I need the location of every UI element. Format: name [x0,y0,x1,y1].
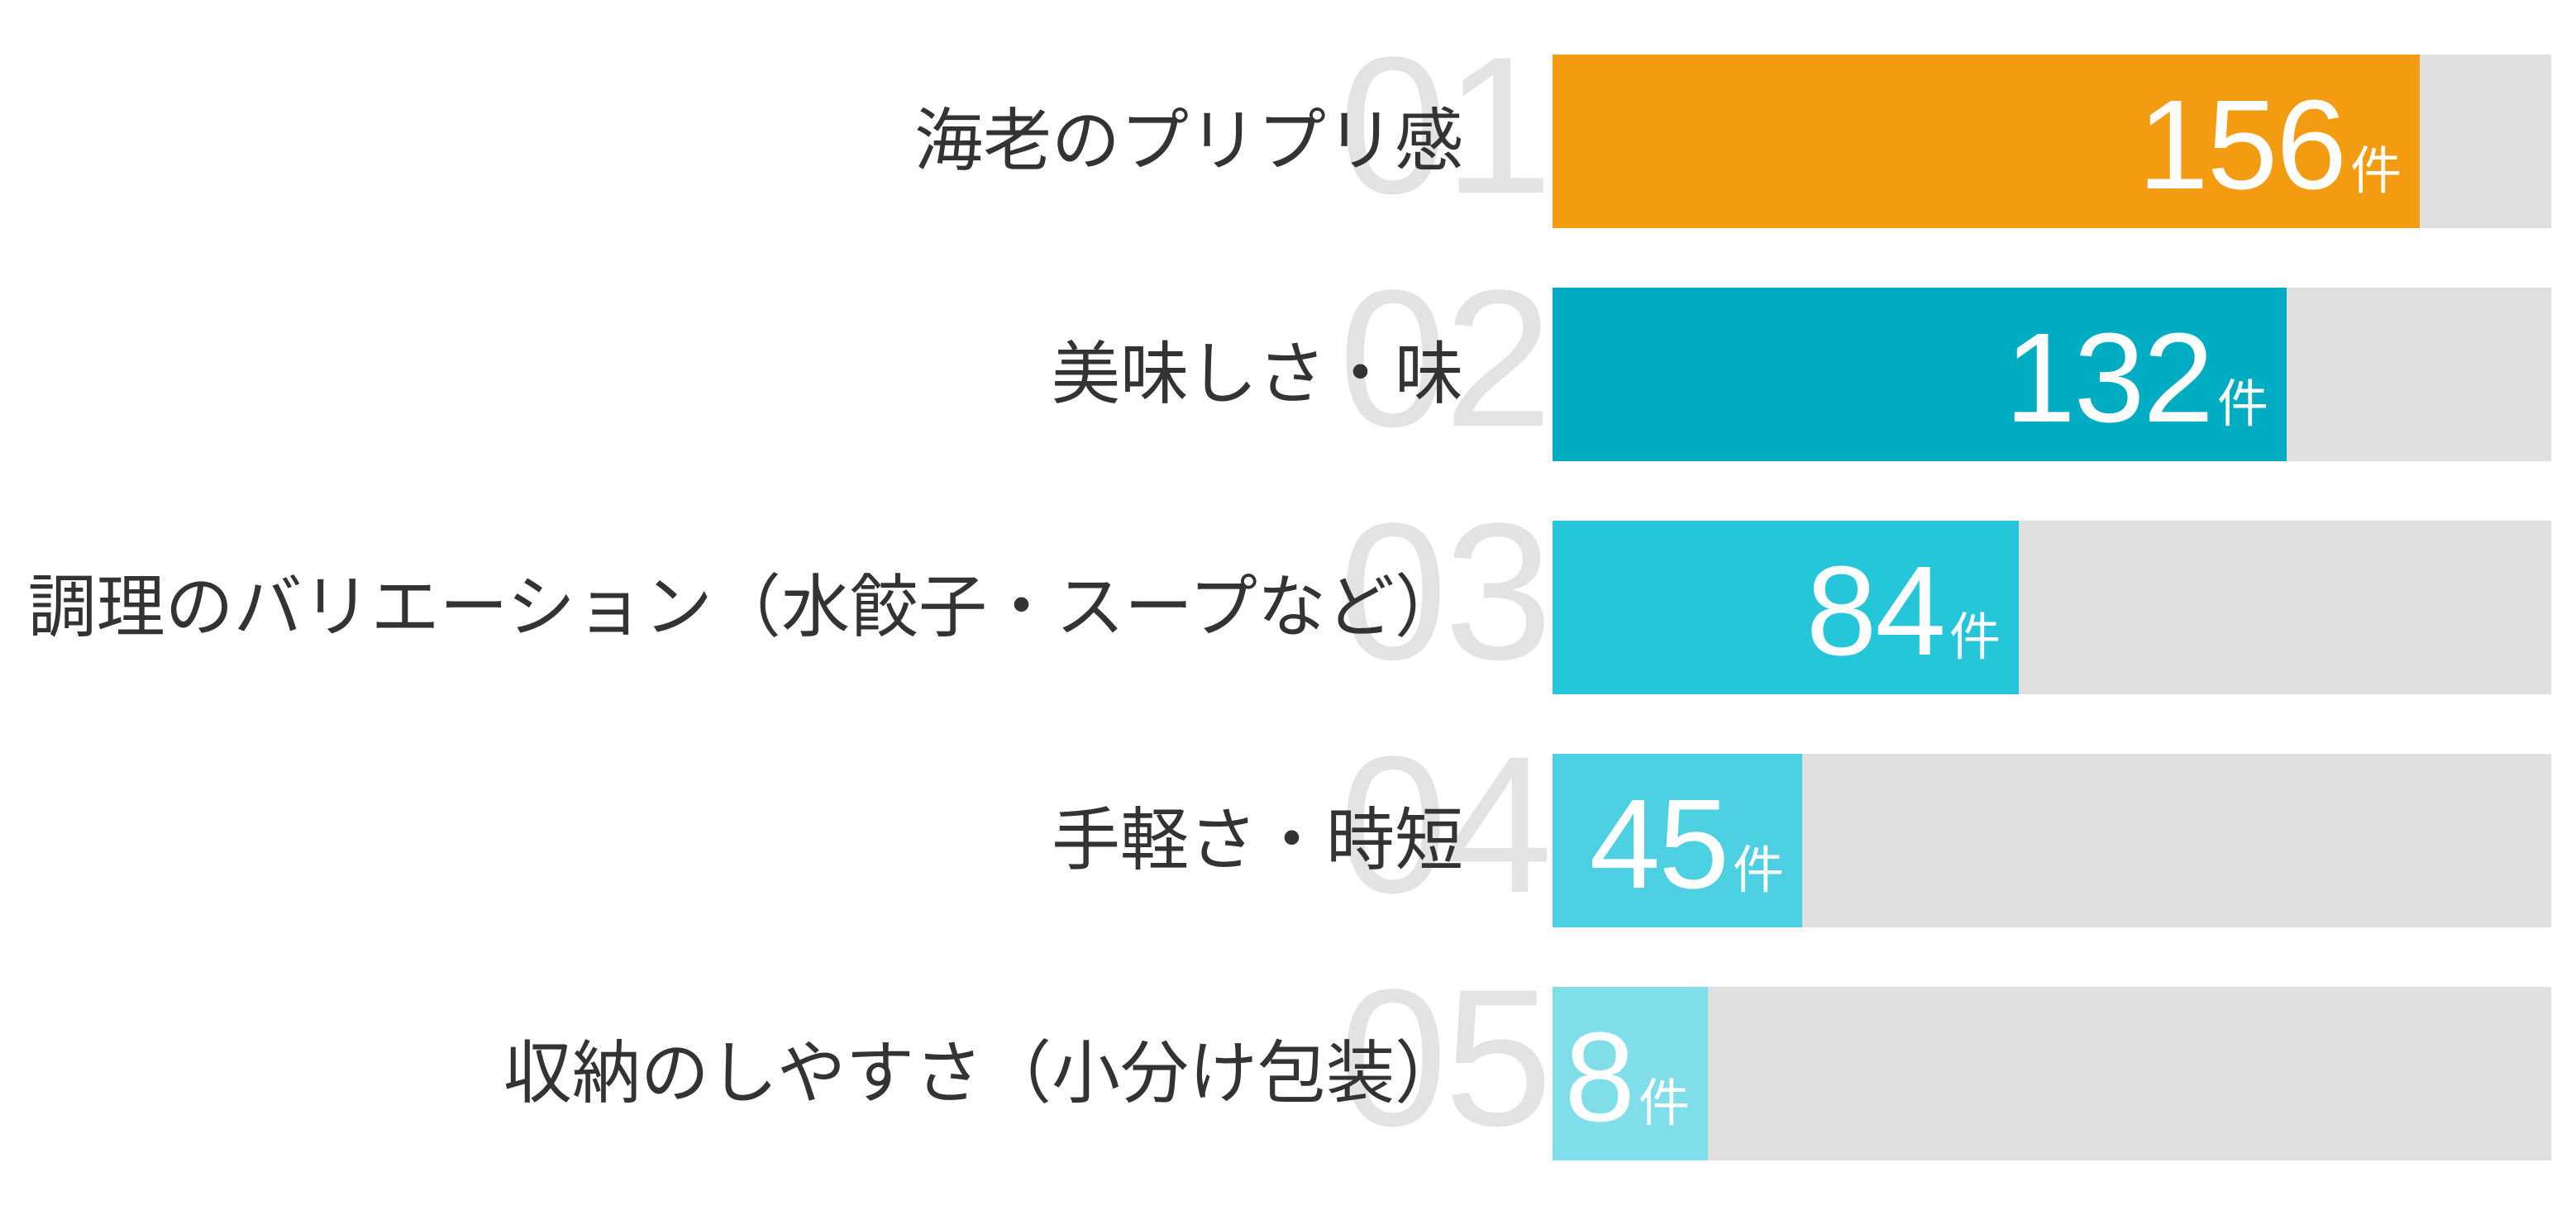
bar track 3 [1553,521,2551,694]
row 5 [503,949,2551,1167]
bar 5: 8件 [1564,1006,1690,1148]
label 5: 収納のしやすさ（小分け包装） [503,1035,1463,1112]
bar 3: 84件 [1806,540,2001,682]
bar track 4 [1553,754,2551,927]
ghost number 05: 05 [1338,949,1549,1167]
bar track 1 [1553,55,2551,228]
bar 1 [1553,55,2420,228]
bar 4: 45件 [1590,773,1784,915]
bar 2: 132件 [2005,307,2268,449]
bar 3 [1553,521,2019,694]
bar 5 [1553,987,1708,1160]
bar 2 [1553,288,2287,461]
label 3: 調理のバリエーション（水餃子・スープなど） [28,569,1463,646]
bar 4 [1553,754,1802,927]
bar 1: 156件 [2138,74,2402,216]
ghost number 03: 03 [1338,483,1549,701]
label 1: 海老のプリプリ感 [914,102,1463,179]
row 3 [28,483,2551,701]
bar track 2 [1553,288,2551,461]
row 1 [914,17,2551,235]
ghost number 02: 02 [1338,250,1549,468]
ghost number 01: 01 [1338,17,1549,235]
row 2 [1052,250,2551,468]
bar track 5 [1553,987,2551,1160]
ghost number 04: 04 [1338,716,1549,934]
row 4 [1052,716,2551,934]
label 4: 手軽さ・時短 [1052,802,1463,879]
label 2: 美味しさ・味 [1052,336,1463,412]
